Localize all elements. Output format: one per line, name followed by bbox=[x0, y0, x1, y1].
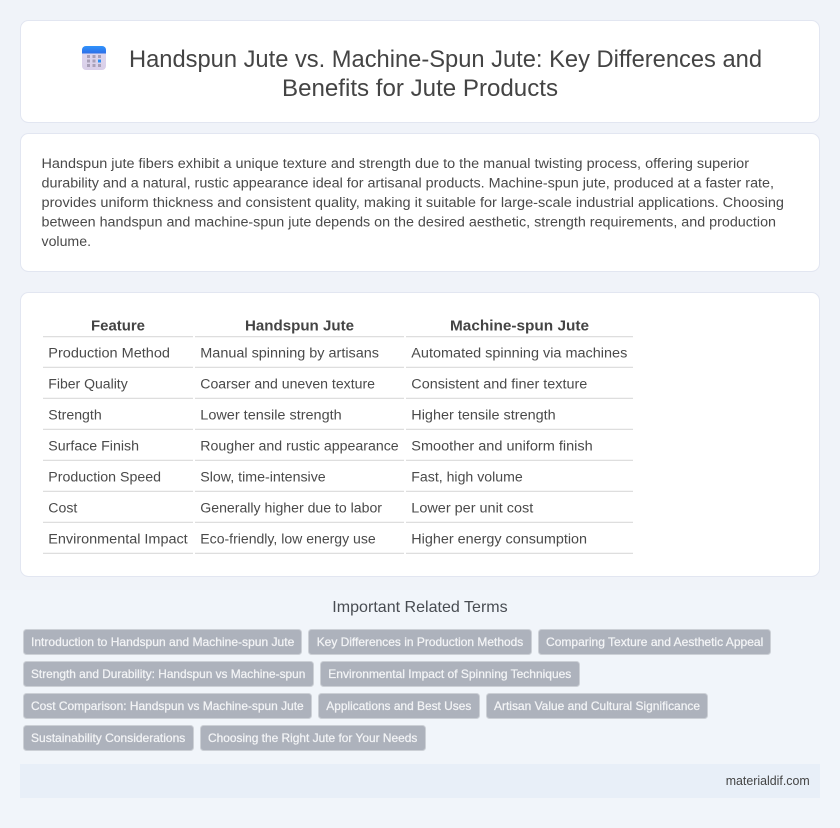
tag: introduction: Introduction to Handspun and Machine-spun Jute bbox=[31, 635, 295, 649]
table row: fiber quality: Consistent and finer texture bbox=[411, 377, 587, 393]
table row: production speed bbox=[43, 470, 633, 491]
table row: environmental impact bbox=[43, 532, 633, 553]
table row: fiber quality bbox=[43, 377, 633, 398]
table row: environmental impact: Eco-friendly, low energy use bbox=[200, 532, 376, 548]
heading: important related terms: Important Related Terms bbox=[332, 599, 508, 616]
table row: production method bbox=[43, 346, 633, 367]
tag: comparing texture bbox=[538, 630, 770, 654]
tag: artisan value bbox=[486, 694, 708, 718]
tag: introduction bbox=[24, 630, 302, 654]
table row: fiber quality: Coarser and uneven texture bbox=[200, 377, 375, 393]
tag: key differences: Key Differences in Production Methods bbox=[317, 635, 523, 649]
panel: header bbox=[20, 20, 820, 122]
table row: cost: Cost bbox=[48, 501, 77, 517]
table row: production method: Manual spinning by artisans bbox=[200, 346, 379, 362]
icon: calendar bbox=[82, 46, 106, 70]
tag: comparing texture: Comparing Texture and Aesthetic Appeal bbox=[546, 635, 763, 649]
table row: strength bbox=[43, 408, 633, 429]
tag: sustainability bbox=[24, 726, 194, 750]
tag: cost comparison: Cost Comparison: Handspun vs Machine-spun Jute bbox=[31, 699, 304, 713]
table row: production speed: Slow, time-intensive bbox=[200, 470, 326, 486]
footer bbox=[20, 764, 820, 798]
tag: choosing the right jute bbox=[200, 726, 426, 750]
panel: related term tags bbox=[24, 630, 770, 750]
table header row: Feature bbox=[91, 319, 145, 335]
table row: environmental impact: Higher energy consumption bbox=[411, 532, 587, 548]
tag: environmental impact bbox=[320, 662, 580, 686]
text block: summary paragraph: durability and a natural, rustic appearance ideal for artisanal products. Machine-spun jute, produced at a faster rate, bbox=[42, 176, 774, 192]
tag: environmental impact: Environmental Impact of Spinning Techniques bbox=[328, 667, 571, 681]
title: Handspun Jute vs. Machine-Spun Jute: Key Differences and bbox=[129, 46, 762, 73]
table row: strength: Lower tensile strength bbox=[200, 408, 342, 424]
table row: strength: Higher tensile strength bbox=[411, 408, 556, 424]
text block: summary paragraph bbox=[42, 156, 784, 250]
table row: production speed: Production Speed bbox=[48, 470, 161, 486]
tag: applications: Applications and Best Uses bbox=[326, 699, 471, 713]
title: Benefits for Jute Products bbox=[282, 75, 558, 102]
tag: sustainability: Sustainability Considerations bbox=[31, 731, 185, 745]
table row: cost bbox=[43, 501, 633, 522]
table row: cost: Generally higher due to labor bbox=[200, 501, 382, 517]
table row: surface finish: Surface Finish bbox=[48, 439, 139, 455]
table row: fiber quality: Fiber Quality bbox=[48, 377, 129, 393]
table header row: Machine-spun Jute bbox=[450, 319, 589, 335]
tag: strength and durability: Strength and Durability: Handspun vs Machine-spun bbox=[31, 667, 305, 681]
table row: production speed: Fast, high volume bbox=[411, 470, 523, 486]
table header row: Handspun Jute bbox=[245, 319, 354, 335]
tag: strength and durability bbox=[24, 662, 314, 686]
text block: summary paragraph: between handspun and machine-spun jute depends on the desired aesthetic, strength requirements, and production bbox=[42, 214, 776, 230]
table row: surface finish bbox=[43, 439, 633, 460]
table row: strength: Strength bbox=[48, 408, 102, 424]
footer: materialdif.com bbox=[726, 774, 810, 788]
tag: cost comparison bbox=[24, 694, 312, 718]
table header row bbox=[43, 319, 633, 337]
table row: environmental impact: Environmental Impact bbox=[48, 532, 188, 548]
panel: comparison table bbox=[20, 292, 820, 576]
panel: introduction bbox=[20, 134, 820, 272]
tag: artisan value: Artisan Value and Cultural Significance bbox=[494, 699, 700, 713]
text block: summary paragraph: provides uniform thickness and consistent quality, making it suitable for large-scale industrial applications. Choosing bbox=[42, 195, 784, 211]
text block: summary paragraph: volume. bbox=[42, 234, 91, 250]
tag: choosing the right jute: Choosing the Right Jute for Your Needs bbox=[208, 731, 417, 745]
table row: cost: Lower per unit cost bbox=[411, 501, 533, 517]
table row: production method: Automated spinning via machines bbox=[411, 346, 627, 362]
table row: production method: Production Method bbox=[48, 346, 170, 362]
tag: applications bbox=[318, 694, 480, 718]
text block: summary paragraph: Handspun jute fibers exhibit a unique texture and strength due to the manual twisting process, offering superior bbox=[42, 156, 749, 172]
tag: key differences bbox=[308, 630, 532, 654]
table row: surface finish: Rougher and rustic appearance bbox=[200, 439, 399, 455]
title bbox=[129, 46, 762, 102]
table row: surface finish: Smoother and uniform finish bbox=[411, 439, 593, 455]
